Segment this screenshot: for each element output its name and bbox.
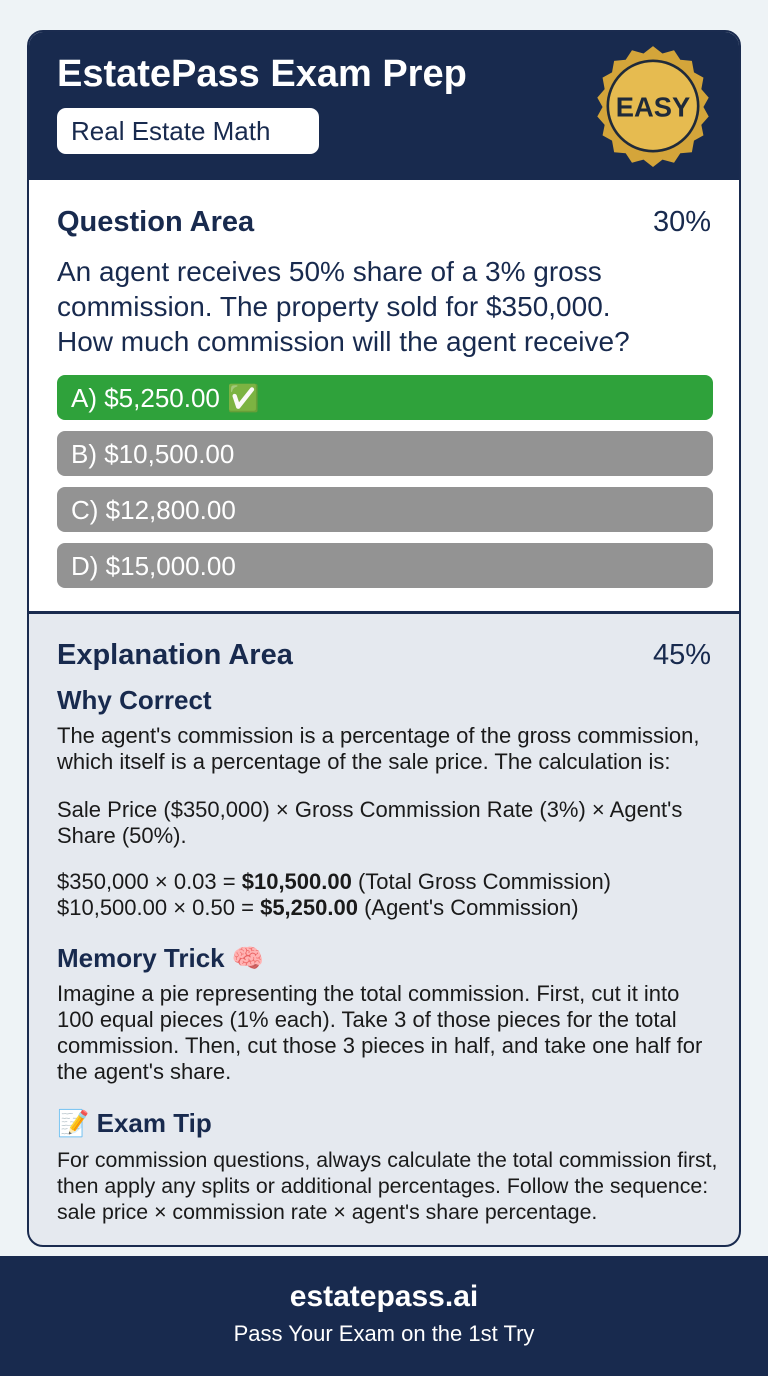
footer tagline: Pass Your Exam on the 1st Try — [234, 1321, 534, 1346]
option A correct: A) $5,250.00 ✅ — [71, 383, 260, 413]
memory trick heading: Memory Trick 🧠 — [57, 943, 264, 973]
percentage: 45% — [653, 639, 711, 671]
icon: easy badge — [597, 46, 709, 167]
option B — [57, 431, 713, 476]
subtitle pill: Real Estate Math — [71, 116, 270, 146]
calculation — [57, 869, 611, 920]
footer brand: estatepass.ai — [290, 1280, 478, 1313]
exam tip text: For commission questions, always calculate the total commission first, then apply any splits or additional percentages. Follow the sequence: sale price × commission rate × agent's share percentage. — [57, 1148, 717, 1224]
icon: easy badge: EASY — [616, 92, 690, 123]
heading: Explanation Area — [57, 639, 293, 671]
why correct heading: Why Correct — [57, 685, 212, 715]
option D — [57, 543, 713, 588]
calculation: $350,000 × 0.03 = $10,500.00 (Total Gross Commission) — [57, 869, 611, 894]
exam tip heading: 📝 Exam Tip — [57, 1108, 212, 1138]
formula: Sale Price ($350,000) × Gross Commission Rate (3%) × Agent's Share (50%). — [57, 797, 682, 848]
memory trick text: Imagine a pie representing the total commission. First, cut it into 100 equal pieces (1% each). Take 3 of those pieces for the total commission. Then, cut those 3 pieces in half, and take one half for the agent's share. — [57, 981, 702, 1084]
explanation text: The agent's commission is a percentage of the gross commission, which itself is a percentage of the sale price. The calculation is: — [57, 723, 700, 774]
title: EstatePass Exam Prep — [57, 53, 467, 95]
panel: explanation area — [57, 639, 717, 1224]
subtitle pill — [57, 108, 319, 154]
heading: Question Area — [57, 206, 254, 238]
option D: D) $15,000.00 — [71, 551, 236, 581]
option C — [57, 487, 713, 532]
footer — [0, 1256, 768, 1376]
header — [29, 32, 739, 180]
option C: C) $12,800.00 — [71, 495, 236, 525]
percentage: 30% — [653, 206, 711, 238]
option B: B) $10,500.00 — [71, 439, 234, 469]
option A correct — [57, 375, 713, 420]
calculation: $10,500.00 × 0.50 = $5,250.00 (Agent's Commission) — [57, 895, 579, 920]
question text: An agent receives 50% share of a 3% gross commission. The property sold for $350,000. How much commission will the agent receive? — [57, 256, 630, 357]
panel: question area — [29, 180, 739, 614]
